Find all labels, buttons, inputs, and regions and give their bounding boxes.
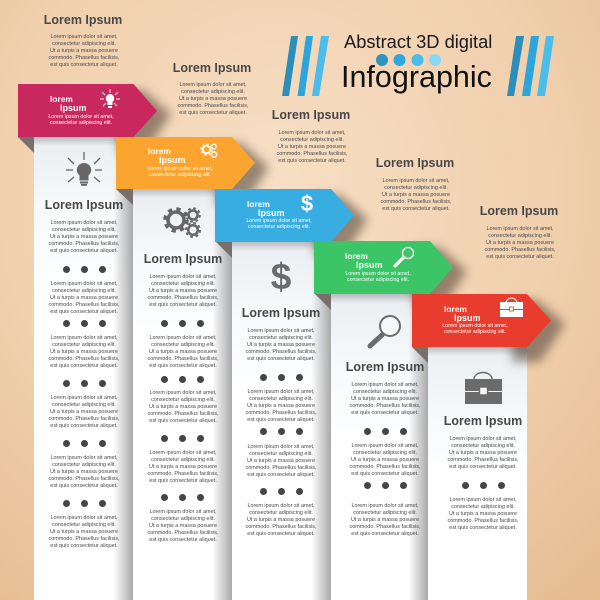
arrow label second line: Ipsum — [60, 103, 87, 113]
title line: Infographic: Infographic — [341, 60, 492, 94]
top text block 5: Lorem Ipsum — [480, 204, 558, 218]
top text block 1: Lorem Ipsum — [44, 13, 122, 27]
arrow text: consectetur adipiscing elit. — [50, 120, 112, 126]
text block: Lorem ipsum dolor sit amet, — [149, 508, 217, 514]
arrow text: consectetur adipiscing elit. — [248, 224, 310, 230]
arrow label: lorem — [247, 199, 270, 209]
text block: Ut a turpis a massa posuere — [247, 458, 315, 464]
top text block 2: Ut a turpis a massa posuere — [179, 96, 247, 102]
icon: dollar sign: $ — [271, 256, 291, 297]
text block: Ut a turpis a massa posuere — [50, 468, 118, 474]
arrow: orange — [116, 137, 255, 190]
top text block 2: Lorem ipsum dolor sit amet, — [179, 82, 247, 88]
icon: bulb white — [100, 89, 120, 109]
text block: consectetur adipiscing elit. — [249, 510, 313, 516]
top text block 2: consectetur adipiscing elit. — [181, 89, 245, 95]
top text block 3: est quis consectetur aliquet. — [278, 158, 346, 164]
top text block 5: consectetur adipiscing elit. — [488, 233, 552, 239]
text block: est quis consectetur aliquet. — [149, 418, 217, 424]
arrow label second line: Ipsum — [356, 260, 383, 270]
arrow text: consectetur adipiscing elit. — [444, 329, 506, 335]
text block: Ut a turpis a massa posuere — [351, 516, 419, 522]
text block — [147, 508, 219, 542]
top text block 4 — [376, 156, 454, 212]
top text block 3 — [272, 108, 350, 164]
text block: consectetur adipiscing elit. — [52, 522, 116, 528]
top text block 5: Ut a turpis a massa posuere — [486, 240, 554, 246]
arrow text — [135, 166, 225, 179]
text block: Lorem ipsum dolor sit amet, — [247, 444, 315, 450]
arrow text — [36, 114, 126, 127]
text block: commodo. Phasellus facilisis, — [245, 348, 317, 354]
text block: est quis consectetur aliquet. — [351, 470, 419, 476]
text block: est quis consectetur aliquet. — [247, 356, 315, 362]
arrow label: lorem — [148, 146, 171, 156]
text block: Ut a turpis a massa posuere — [50, 528, 118, 534]
dots — [63, 266, 106, 273]
arrow: green — [314, 241, 453, 294]
text block: commodo. Phasellus facilisis, — [147, 410, 219, 416]
text block: est quis consectetur aliquet. — [50, 482, 118, 488]
text block: Ut a turpis a massa posuere — [247, 402, 315, 408]
top text block 1: Ut a turpis a massa posuere — [50, 48, 118, 54]
heading: Lorem Ipsum — [346, 360, 424, 374]
heading: Lorem Ipsum — [45, 198, 123, 212]
text block: est quis consectetur aliquet. — [247, 530, 315, 536]
text block: est quis consectetur aliquet. — [449, 464, 517, 470]
top text block 2 — [173, 61, 251, 116]
arrow label second line: Ipsum — [159, 155, 186, 165]
text block: consectetur adipiscing elit. — [249, 396, 313, 402]
icon: gears — [163, 207, 201, 238]
text block: consectetur adipiscing elit. — [151, 342, 215, 348]
top text block 1: est quis consectetur aliquet. — [50, 62, 118, 68]
dots — [63, 380, 106, 387]
text block: Ut a turpis a massa posuere — [247, 516, 315, 522]
top text block 2: Lorem Ipsum — [173, 61, 251, 75]
top text block 3: commodo. Phasellus facilisis, — [276, 151, 348, 157]
icon: gears white — [200, 143, 218, 159]
text block: est quis consectetur aliquet. — [351, 410, 419, 416]
top text block 4: Ut a turpis a massa posuere — [382, 192, 450, 198]
top text block 3: Lorem ipsum dolor sit amet, — [278, 130, 346, 136]
text block: Ut a turpis a massa posuere — [149, 464, 217, 470]
top text block 4: consectetur adipiscing elit. — [384, 185, 448, 191]
heading: Lorem Ipsum — [242, 306, 320, 320]
top text block 2: commodo. Phasellus facilisis, — [177, 103, 249, 109]
arrow text: Lorem ipsum dolor sit amet, — [246, 218, 312, 224]
top text block 1: Lorem ipsum dolor sit amet, — [50, 34, 118, 40]
text block: est quis consectetur aliquet. — [449, 524, 517, 530]
text block: commodo. Phasellus facilisis, — [447, 518, 519, 524]
dots — [364, 428, 406, 434]
panel: column 1 — [34, 137, 133, 600]
text block: consectetur adipiscing elit. — [451, 442, 515, 448]
text block: commodo. Phasellus facilisis, — [48, 536, 120, 542]
arrow text: Lorem ipsum dolor sit amet, — [48, 114, 114, 120]
title line: Abstract 3D digital: Abstract 3D digital — [344, 31, 492, 52]
text block: commodo. Phasellus facilisis, — [48, 416, 120, 422]
text block: Lorem ipsum dolor sit amet, — [247, 388, 315, 394]
icon: light bulb — [66, 152, 102, 186]
text block: Ut a turpis a massa posuere — [247, 342, 315, 348]
text block: consectetur adipiscing elit. — [353, 450, 417, 456]
text block: consectetur adipiscing elit. — [353, 388, 417, 394]
text block: Lorem ipsum dolor sit amet, — [149, 390, 217, 396]
text block: commodo. Phasellus facilisis, — [245, 524, 317, 530]
top text block 1: commodo. Phasellus facilisis, — [48, 55, 120, 61]
text block: consectetur adipiscing elit. — [52, 288, 116, 294]
text block — [245, 388, 317, 422]
text block: commodo. Phasellus facilisis, — [48, 356, 120, 362]
text block — [245, 502, 317, 536]
dots — [161, 435, 204, 442]
text block: consectetur adipiscing elit. — [52, 342, 116, 348]
text block: Ut a turpis a massa posuere — [351, 456, 419, 462]
top text block 5: est quis consectetur aliquet. — [486, 254, 554, 260]
text block — [48, 514, 120, 548]
text block: Lorem ipsum dolor sit amet, — [149, 274, 217, 280]
text block: commodo. Phasellus facilisis, — [147, 470, 219, 476]
text block: Lorem ipsum dolor sit amet, — [449, 436, 517, 442]
dots — [161, 494, 204, 501]
text block: Lorem ipsum dolor sit amet, — [149, 450, 217, 456]
text block — [349, 382, 421, 416]
text block: consectetur adipiscing elit. — [353, 510, 417, 516]
text block — [337, 502, 433, 538]
text block: commodo. Phasellus facilisis, — [245, 410, 317, 416]
dots — [161, 376, 204, 383]
text block: Lorem ipsum dolor sit amet, — [449, 496, 517, 502]
arrow text: Lorem ipsum dolor sit amet, — [442, 322, 508, 328]
text block: consectetur adipiscing elit. — [249, 334, 313, 340]
arrow: red — [412, 294, 551, 347]
text block: Lorem ipsum dolor sit amet, — [50, 334, 118, 340]
arrow text — [234, 218, 324, 231]
text block — [147, 390, 219, 424]
text block: Lorem ipsum dolor sit amet, — [247, 502, 315, 508]
icon: right stripes — [507, 36, 554, 96]
text block: Lorem ipsum dolor sit amet, — [351, 502, 419, 508]
text block: Ut a turpis a massa posuere — [50, 234, 118, 240]
text block: consectetur adipiscing elit. — [52, 462, 116, 468]
text block — [48, 334, 120, 368]
text block: est quis consectetur aliquet. — [149, 478, 217, 484]
dots — [63, 500, 106, 507]
text block: Ut a turpis a massa posuere — [149, 522, 217, 528]
text block: consectetur adipiscing elit. — [249, 450, 313, 456]
icon: left stripes — [282, 36, 329, 96]
text block — [147, 450, 219, 484]
panel: column 5 — [428, 347, 527, 600]
heading: Lorem Ipsum — [444, 414, 522, 428]
top text block 2: est quis consectetur aliquet. — [179, 110, 247, 116]
text block — [147, 334, 219, 368]
panel: column 2 — [133, 189, 232, 600]
text block: commodo. Phasellus facilisis, — [48, 476, 120, 482]
text block: commodo. Phasellus facilisis, — [349, 464, 421, 470]
text block: commodo. Phasellus facilisis, — [147, 294, 219, 300]
text block — [337, 442, 433, 478]
dots — [260, 428, 303, 435]
text block — [435, 496, 531, 532]
arrow text: consectetur adipiscing elit. — [149, 172, 211, 178]
text block: est quis consectetur aliquet. — [50, 422, 118, 428]
top text block 1: consectetur adipiscing elit. — [52, 41, 116, 47]
arrow label: lorem — [50, 94, 73, 104]
dots — [63, 440, 106, 447]
arrow text: Lorem ipsum dolor sit amet, — [147, 166, 213, 172]
text block: Ut a turpis a massa posuere — [149, 404, 217, 410]
top text block 3: Ut a turpis a massa posuere — [278, 144, 346, 150]
arrow: blue — [215, 189, 354, 242]
text block: commodo. Phasellus facilisis, — [349, 402, 421, 408]
text block: Lorem ipsum dolor sit amet, — [50, 394, 118, 400]
top text block 5: Lorem ipsum dolor sit amet, — [486, 226, 554, 232]
arrow text — [333, 270, 423, 284]
top text block 4: commodo. Phasellus facilisis, — [380, 199, 452, 205]
text block: est quis consectetur aliquet. — [149, 362, 217, 368]
text block: est quis consectetur aliquet. — [351, 530, 419, 536]
text block: consectetur adipiscing elit. — [151, 280, 215, 286]
text block: Lorem ipsum dolor sit amet, — [50, 220, 118, 226]
text block: Ut a turpis a massa posuere — [351, 396, 419, 402]
arrow label: lorem — [345, 251, 368, 261]
title — [282, 31, 554, 96]
arrow: crimson — [18, 84, 157, 137]
text block: commodo. Phasellus facilisis, — [147, 356, 219, 362]
top text block 3: Lorem Ipsum — [272, 108, 350, 122]
text block — [48, 280, 120, 314]
text block — [147, 274, 219, 308]
top text block 4: Lorem Ipsum — [376, 156, 454, 170]
text block: commodo. Phasellus facilisis, — [147, 530, 219, 536]
text block — [48, 454, 120, 488]
dots — [161, 320, 204, 327]
text block: consectetur adipiscing elit. — [151, 516, 215, 522]
icon: magnifying glass — [368, 315, 401, 348]
dots — [260, 374, 303, 381]
text block: consectetur adipiscing elit. — [151, 396, 215, 402]
text block: commodo. Phasellus facilisis, — [48, 302, 120, 308]
icon: briefcase white — [500, 297, 523, 318]
text block — [48, 394, 120, 428]
text block: consectetur adipiscing elit. — [151, 456, 215, 462]
arrow label second line: Ipsum — [258, 208, 285, 218]
dots — [63, 320, 106, 327]
text block: Ut a turpis a massa posuere — [449, 450, 517, 456]
icon: dollar white: $ — [301, 191, 313, 216]
text block: est quis consectetur aliquet. — [247, 416, 315, 422]
text block: Lorem ipsum dolor sit amet, — [149, 334, 217, 340]
text block: est quis consectetur aliquet. — [247, 472, 315, 478]
text block: Lorem ipsum dolor sit amet, — [247, 328, 315, 334]
text block: Ut a turpis a massa posuere — [50, 294, 118, 300]
arrow text: Lorem ipsum dolor sit amet, — [345, 270, 411, 276]
top text block 4: est quis consectetur aliquet. — [382, 206, 450, 212]
text block: Ut a turpis a massa posuere — [149, 348, 217, 354]
panel: column 4 — [331, 294, 428, 600]
text block: Ut a turpis a massa posuere — [50, 348, 118, 354]
text block: Ut a turpis a massa posuere — [449, 510, 517, 516]
icon: four dots — [376, 54, 441, 66]
text block: commodo. Phasellus facilisis, — [349, 524, 421, 530]
dots — [364, 482, 406, 488]
text block: est quis consectetur aliquet. — [50, 362, 118, 368]
text block: commodo. Phasellus facilisis, — [48, 240, 120, 246]
text block: est quis consectetur aliquet. — [149, 536, 217, 542]
icon: magnifier white — [393, 246, 415, 268]
text block — [245, 444, 317, 478]
text block — [48, 220, 120, 254]
text block: Lorem ipsum dolor sit amet, — [50, 514, 118, 520]
top text block 5: commodo. Phasellus facilisis, — [484, 247, 556, 253]
text block: consectetur adipiscing elit. — [52, 402, 116, 408]
text block: commodo. Phasellus facilisis, — [447, 456, 519, 462]
top text block 5 — [480, 204, 558, 260]
top text block 4: Lorem ipsum dolor sit amet, — [382, 178, 450, 184]
top text block 3: consectetur adipiscing elit. — [280, 137, 344, 143]
heading: Lorem Ipsum — [144, 252, 222, 266]
text block: commodo. Phasellus facilisis, — [245, 464, 317, 470]
text block: Lorem ipsum dolor sit amet, — [351, 382, 419, 388]
arrow text — [430, 322, 520, 336]
panel: column 3 — [232, 242, 331, 600]
text block: est quis consectetur aliquet. — [149, 302, 217, 308]
dots — [462, 482, 504, 488]
arrow label: lorem — [444, 304, 467, 314]
text block: Ut a turpis a massa posuere — [149, 288, 217, 294]
text block: Lorem ipsum dolor sit amet, — [50, 454, 118, 460]
text block: Lorem ipsum dolor sit amet, — [351, 442, 419, 448]
text block — [245, 328, 317, 362]
text block: consectetur adipiscing elit. — [52, 226, 116, 232]
icon: briefcase — [464, 371, 502, 405]
text block: est quis consectetur aliquet. — [50, 542, 118, 548]
text block: Lorem ipsum dolor sit amet, — [50, 280, 118, 286]
dots — [260, 488, 303, 495]
arrow label second line: Ipsum — [454, 313, 481, 323]
text block: Ut a turpis a massa posuere — [50, 408, 118, 414]
text block: est quis consectetur aliquet. — [50, 248, 118, 254]
top text block 1 — [44, 13, 122, 68]
text block: consectetur adipiscing elit. — [451, 504, 515, 510]
arrow text: consectetur adipiscing elit. — [347, 277, 409, 283]
text block: est quis consectetur aliquet. — [50, 308, 118, 314]
text block — [435, 436, 531, 470]
